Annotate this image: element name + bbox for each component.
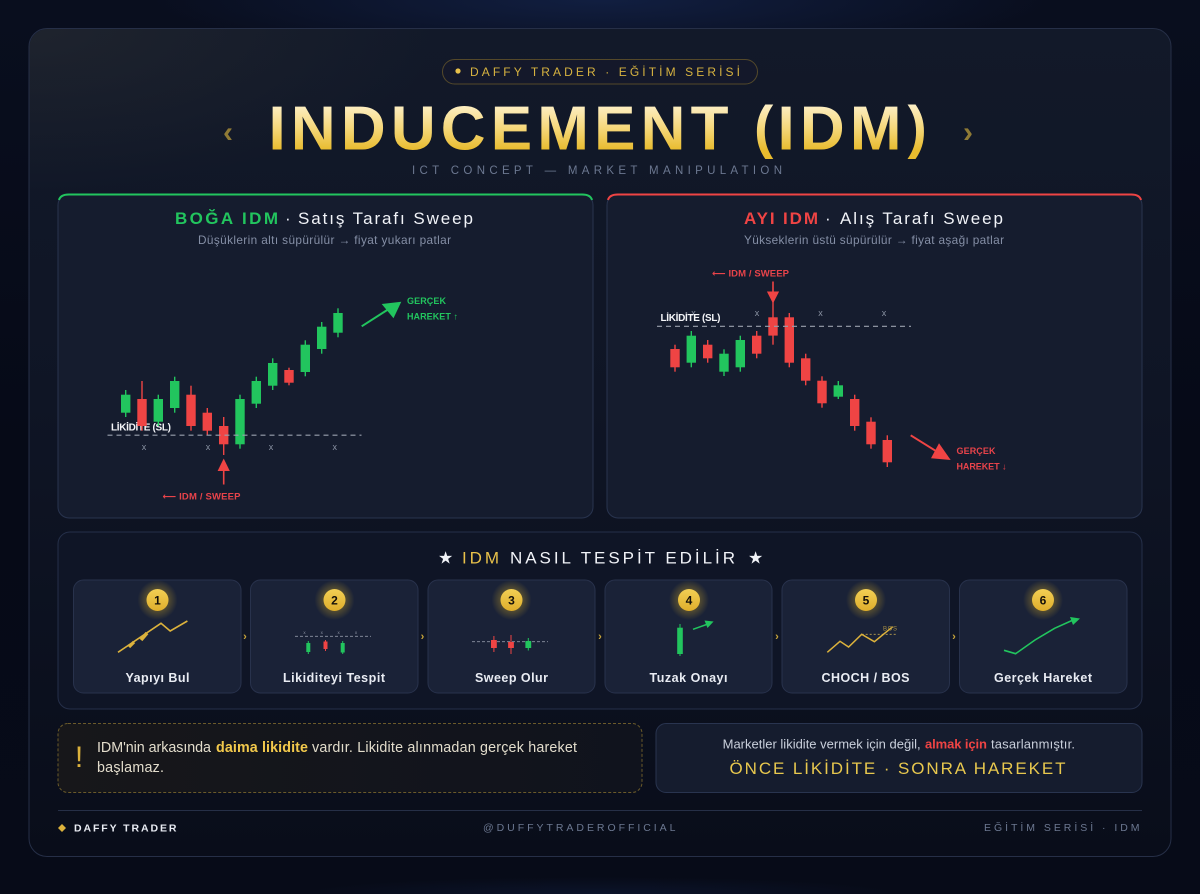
subheading: bullish: Düşüklerin altı süpürülür → fiyat yukarı patlar: [198, 233, 451, 247]
callout: motto: [656, 724, 1142, 792]
heading: bullish: [175, 209, 473, 228]
heading: steps: [438, 548, 763, 568]
label: real move down: GERÇEK: [956, 446, 996, 456]
icon: break of structure: [827, 626, 897, 652]
heading: steps: ★: [748, 548, 763, 568]
x markers: x: [332, 442, 337, 452]
step 6: Gerçek Hareket: [994, 671, 1093, 685]
callout text: IDM'nin arkasında: [97, 740, 211, 756]
motto sentence: tasarlanmıştır.: [991, 736, 1075, 752]
candlestick chart: bearish: [670, 300, 892, 467]
chevron: ›: [775, 631, 779, 643]
title: IDM: [778, 94, 902, 164]
arrow: real move down: [911, 435, 951, 460]
footer: @DUFFYTRADEROFFICIAL: [483, 822, 676, 834]
heading: steps: IDM: [462, 548, 499, 568]
label: IDM sweep: ⟵ IDM / SWEEP: [162, 492, 241, 502]
icon: liquidity line: x: [321, 630, 324, 635]
x markers: x: [269, 442, 274, 452]
motto headline: ÖNCE LİKİDİTE · SONRA HAREKET: [730, 759, 1066, 778]
liquidity label: LİKİDİTE (SL): [111, 420, 171, 434]
footer: DAFFY TRADER: [74, 822, 177, 834]
arrow: real move up: [362, 302, 401, 326]
heading: bearish: ·: [825, 209, 831, 228]
motto sentence: almak için: [925, 736, 987, 752]
callout: warning: [58, 724, 642, 792]
panel: bullish IDM: [58, 194, 593, 518]
step 1: 1: [154, 594, 161, 608]
heading: bearish: [744, 209, 1003, 228]
step 5: [782, 580, 950, 693]
heading: bearish: AYI IDM: [744, 209, 818, 228]
chevron: ›: [243, 631, 247, 643]
callout text: [97, 740, 577, 776]
x markers: x: [882, 308, 887, 318]
heading: steps: NASIL TESPİT EDİLİR: [510, 548, 735, 568]
heading: steps: ★: [438, 548, 453, 568]
label: real move up: HAREKET ↑: [407, 312, 458, 322]
icon: break of structure: BOS: [883, 626, 897, 632]
x markers: x: [142, 442, 147, 452]
x markers: x: [755, 308, 760, 318]
step 3: 3: [508, 594, 515, 608]
title: (: [754, 95, 774, 160]
subtitle: ICT CONCEPT — MARKET MANIPULATION: [412, 165, 782, 177]
label: real move down: HAREKET ↓: [956, 462, 1006, 472]
panel: bearish IDM: [607, 194, 1142, 518]
heading: bullish: BOĞA IDM: [175, 209, 278, 228]
motto sentence: Marketler likidite vermek için değil,: [723, 736, 921, 752]
icon: liquidity line: x: [303, 630, 306, 635]
step 2: Likiditeyi Tespit: [283, 671, 386, 685]
icon: sweep candles: [472, 635, 548, 654]
footer: EĞİTİM SERİSİ · IDM: [984, 821, 1140, 834]
title: ›: [963, 116, 973, 149]
label: real move down: [956, 446, 1006, 472]
liquidity label: LİKİDİTE (SL): [660, 311, 720, 324]
title: ‹: [223, 116, 233, 149]
step 2: 2: [331, 594, 338, 608]
heading: bullish: Satış Tarafı Sweep: [298, 209, 473, 228]
step 1: [74, 580, 241, 693]
step 4: [605, 580, 772, 693]
label: real move up: [407, 296, 458, 322]
x markers: x: [818, 308, 823, 318]
icon: real move curve: [1004, 617, 1080, 654]
callout text: vardır. Likidite alınmadan gerçek hareket: [312, 740, 577, 756]
footer: [58, 810, 1142, 834]
step 4: Tuzak Onayı: [650, 671, 728, 685]
title: [223, 94, 973, 164]
header badge: [442, 60, 758, 84]
x markers: x: [206, 442, 211, 452]
step 1: Yapıyı Bul: [126, 671, 190, 685]
icon: liquidity line: [295, 630, 371, 654]
icon: trap confirmation: [677, 620, 714, 656]
step 5: CHOCH / BOS: [822, 671, 910, 685]
heading: bullish: ·: [285, 209, 291, 228]
x markers: [142, 442, 337, 452]
subheading: bearish: Yükseklerin üstü süpürülür → fiyat aşağı patlar: [744, 233, 1004, 247]
step 5: 5: [863, 594, 870, 608]
x markers: x: [691, 308, 696, 318]
arrow: sweep down: [767, 282, 779, 304]
title: INDUCEMENT: [268, 94, 729, 164]
label: real move up: GERÇEK: [407, 296, 446, 306]
callout text: başlamaz.: [97, 760, 164, 776]
liquidity dashed line: [657, 325, 911, 327]
x markers: [691, 308, 887, 318]
step 2: [250, 580, 418, 693]
candlestick chart: bullish: [121, 308, 343, 455]
chevron: ›: [598, 631, 602, 643]
step 3: [428, 580, 595, 693]
step 3: Sweep Olur: [475, 671, 548, 685]
motto sentence: [723, 736, 1075, 752]
liquidity dashed line: [108, 434, 362, 436]
callout text: daima likidite: [216, 740, 308, 756]
icon: liquidity line: x: [355, 630, 358, 635]
chevron: ›: [952, 631, 956, 643]
header badge: DAFFY TRADER · EĞİTİM SERİSİ: [470, 64, 740, 79]
arrow: sweep up: [218, 458, 230, 484]
title: ): [908, 95, 927, 160]
step 4: 4: [686, 594, 693, 608]
panel: how to detect IDM: [58, 532, 1142, 709]
heading: bearish: Alış Tarafı Sweep: [840, 209, 1003, 228]
icon: liquidity line: x: [337, 630, 340, 635]
step 6: [960, 580, 1127, 693]
icon: exclamation: !: [75, 741, 83, 774]
chevron: ›: [421, 631, 425, 643]
label: IDM sweep: ⟵ IDM / SWEEP: [712, 268, 790, 280]
icon: structure line: [118, 621, 187, 652]
step 6: 6: [1040, 594, 1047, 608]
